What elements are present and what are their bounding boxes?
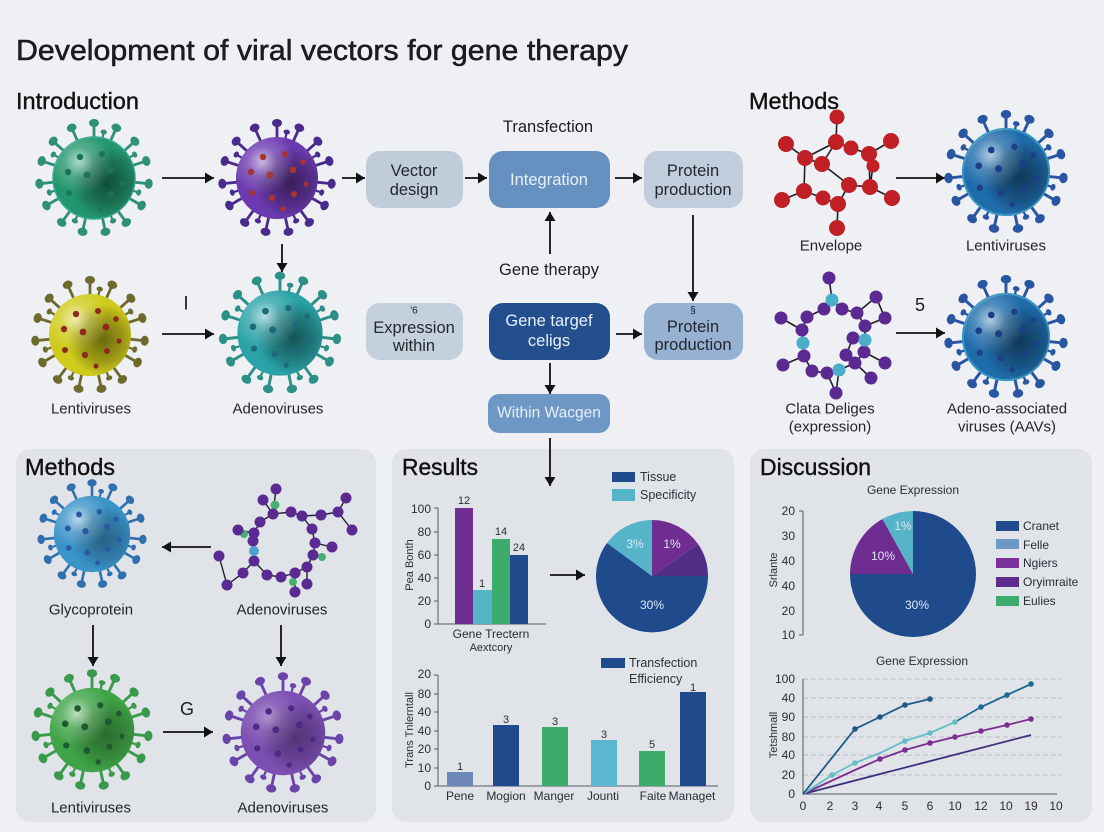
line chart: gene expression: 10 — [1049, 799, 1063, 813]
box: integration — [489, 151, 610, 208]
bar chart: transfection efficiency: 40 — [418, 724, 431, 738]
pie chart: gene expression: 30 — [782, 529, 795, 543]
bar chart: transfection efficiency: Jounti — [587, 789, 619, 803]
arrow: gene target to protein — [616, 333, 642, 335]
bar chart: gene treatment: Pea Bonth — [404, 539, 416, 591]
line chart: gene expression: 20 — [782, 768, 795, 782]
bar chart: transfection efficiency: Trans Tnlerntall — [404, 692, 416, 768]
bar chart: transfection efficiency: 1 — [457, 761, 463, 773]
bar chart: gene treatment: 80 — [418, 525, 431, 539]
label: glycoprotein: Glycoprotein — [49, 602, 133, 618]
legend: transfection efficiency: Transfection — [629, 656, 697, 670]
box: protein production top: Protein — [667, 162, 719, 180]
box: vector design: Vector — [391, 162, 438, 180]
legend: gene expression: Ngiers — [1023, 556, 1058, 570]
title: Development of viral vectors for gene therapy — [16, 35, 629, 67]
bar chart: gene treatment: Aextcory — [470, 642, 513, 654]
bar chart: gene treatment — [404, 495, 546, 654]
label: adeno-associated viruses: viruses (AAVs) — [958, 418, 1056, 436]
arrow: purple to teal — [281, 244, 283, 272]
heading: methods: Methods — [25, 454, 115, 480]
legend: gene expression: Eulies — [1023, 594, 1056, 608]
arrow: glycoprotein down — [92, 625, 94, 666]
pie chart: gene expression: 20 — [782, 604, 795, 618]
line chart: gene expression: Tetshmall — [768, 712, 780, 758]
arrow: protein down — [692, 215, 694, 301]
box: expression within: within — [392, 337, 435, 355]
box: expression within — [366, 303, 463, 360]
legend: gene expression: Cranet — [1023, 519, 1060, 533]
legend: gene expression: Felle — [1023, 538, 1049, 552]
bar chart: transfection efficiency: 3 — [601, 729, 607, 741]
bar chart: gene treatment: 40 — [418, 571, 431, 585]
pie chart: gene expression: 10 — [782, 628, 795, 642]
pie chart: gene expression: 20 — [782, 504, 795, 518]
pie chart: tissue specificity — [596, 520, 708, 632]
label: gene therapy: Gene therapy — [499, 261, 600, 279]
bar chart: gene treatment: 12 — [458, 495, 470, 507]
box: protein production top: production — [654, 181, 732, 199]
chart title: gene expression line: Gene Expression — [876, 654, 968, 668]
box: within wacgen — [488, 394, 610, 433]
line chart: gene expression: 0 — [800, 799, 807, 813]
icon: blue virus top — [944, 110, 1068, 234]
flow diagram — [366, 118, 743, 433]
heading: results: Results — [402, 454, 478, 480]
arrow: envelope to lentiviruses — [896, 177, 945, 179]
heading: introduction: Introduction — [16, 88, 139, 114]
line chart: gene expression: 6 — [927, 799, 934, 813]
bar chart: transfection efficiency: Manger — [534, 789, 574, 803]
line chart: gene expression: 12 — [974, 799, 988, 813]
arrow: molecule to aav — [896, 332, 945, 334]
icon: purple molecule — [774, 272, 892, 400]
line chart: gene expression: 3 — [852, 799, 859, 813]
bar chart: transfection efficiency: 80 — [418, 687, 431, 701]
line chart: gene expression: 100 — [775, 672, 795, 686]
box: expression within: Expression — [373, 319, 455, 337]
arrow: down into results — [549, 438, 551, 486]
line chart: gene expression: 2 — [827, 799, 834, 813]
box: vector design: design — [390, 181, 438, 199]
line chart: gene expression: 10 — [999, 799, 1013, 813]
line chart: gene expression: 80 — [782, 730, 795, 744]
arrow: adenoviruses down — [280, 625, 282, 666]
box: protein production top — [644, 151, 743, 208]
section: methods top right — [749, 88, 1068, 436]
label: envelope: Envelope — [800, 238, 862, 254]
box: integration: Integration — [510, 171, 588, 189]
line chart: gene expression: 40 — [782, 691, 795, 705]
chart title: gene expression pie: Gene Expression — [867, 483, 959, 497]
legend: tissue and specificity: Tissue — [640, 470, 676, 484]
pie chart: tissue specificity: 1% — [663, 537, 681, 551]
bar chart: transfection efficiency: 1 — [690, 682, 696, 694]
bar chart: gene treatment: 20 — [418, 594, 431, 608]
label: clata deliges: Clata Deliges — [785, 400, 875, 418]
box: within wacgen: Within Wacgen — [497, 404, 601, 422]
panel: results — [392, 438, 734, 822]
arrow: bar to pie — [550, 574, 585, 576]
icon: teal virus — [218, 272, 342, 394]
bar chart: transfection efficiency: 0 — [424, 779, 431, 793]
panel: methods — [16, 449, 376, 822]
icon: yellow virus — [31, 276, 149, 394]
bar chart: gene treatment: 14 — [495, 526, 507, 538]
label: lentiviruses: Lentiviruses — [51, 400, 131, 418]
line chart: gene expression: 19 — [1024, 799, 1038, 813]
bar chart: transfection efficiency: 3 — [503, 714, 509, 726]
bar chart: transfection efficiency: Managet — [669, 789, 716, 803]
bar chart: gene treatment: 0 — [424, 617, 431, 631]
legend: tissue and specificity — [612, 470, 697, 502]
line chart: gene expression: 4 — [876, 799, 883, 813]
arrow: gene target to within — [549, 363, 551, 394]
bar chart: gene treatment: 24 — [513, 542, 525, 554]
icon: green virus — [31, 669, 153, 791]
line chart: gene expression — [768, 672, 1063, 813]
bar chart: transfection efficiency: Pene — [446, 789, 474, 803]
label: clata deliges — [785, 400, 875, 436]
bar chart: transfection efficiency: 20 — [418, 667, 431, 681]
box: gene target cells: celigs — [528, 332, 570, 350]
label: adeno-associated viruses: Adeno-associated — [947, 400, 1067, 418]
bar chart: transfection efficiency — [404, 667, 718, 803]
section: introduction — [16, 88, 365, 418]
pie chart: tissue specificity: 30% — [640, 598, 664, 612]
label: clata deliges: (expression) — [789, 418, 871, 436]
arrow: molecule to blue virus — [162, 546, 211, 548]
box: gene target cells — [489, 303, 610, 360]
bar chart: transfection efficiency: 10 — [418, 761, 431, 775]
icon: blue virus bottom — [944, 275, 1068, 399]
panel: discussion — [750, 449, 1092, 822]
label: lentiviruses: Lentiviruses — [966, 238, 1046, 254]
bar chart: transfection efficiency: Mogion — [486, 789, 526, 803]
pie chart: gene expression: 1% — [894, 519, 912, 533]
label: lentiviruses: Lentiviruses — [51, 800, 131, 816]
line chart: gene expression: 90 — [782, 710, 795, 724]
label: G: G — [180, 699, 194, 719]
box: expression within: '6 — [410, 306, 418, 316]
bar chart: gene treatment: 60 — [418, 548, 431, 562]
arrow: green to purple — [163, 731, 213, 733]
line chart: gene expression: 10 — [948, 799, 962, 813]
icon: red molecule — [774, 110, 900, 236]
line chart: gene expression: 0 — [788, 787, 795, 801]
arrow: yellow to teal — [162, 333, 214, 335]
arrow: integration to protein — [615, 177, 642, 179]
pie chart: gene expression: 40 — [782, 579, 795, 593]
box: protein production bottom — [644, 303, 743, 360]
label: I: I — [183, 294, 189, 314]
box: vector design — [366, 151, 463, 208]
icon: purple virus — [218, 119, 336, 237]
arrow: gene therapy to integration — [549, 212, 551, 254]
pie chart: gene expression: 10% — [871, 549, 895, 563]
label: adeno-associated viruses — [947, 400, 1067, 436]
line chart: gene expression: 5 — [902, 799, 909, 813]
bar chart: gene treatment: Gene Trectern — [453, 627, 529, 641]
bar chart: transfection efficiency: 3 — [552, 716, 558, 728]
box: protein production bottom: Protein — [667, 318, 719, 336]
pie chart: gene expression — [768, 504, 976, 642]
label: adenoviruses: Adenoviruses — [233, 400, 323, 418]
box: gene target cells: Gene targef — [505, 312, 593, 330]
heading: discussion: Discussion — [760, 454, 871, 480]
pie chart: gene expression: 30% — [905, 598, 929, 612]
bar chart: gene treatment: 100 — [411, 502, 431, 516]
bar chart: transfection efficiency: 20 — [418, 742, 431, 756]
arrow: green to purple — [162, 177, 214, 179]
legend: gene expression — [996, 519, 1079, 608]
box: protein production bottom: production — [654, 336, 732, 354]
legend: gene expression: Oryimraite — [1023, 575, 1079, 589]
icon: purple virus — [222, 672, 344, 794]
legend: transfection efficiency — [601, 656, 697, 686]
pie chart: gene expression: 40 — [782, 554, 795, 568]
bar chart: transfection efficiency: 40 — [418, 705, 431, 719]
label: adenoviruses upper: Adenoviruses — [237, 602, 327, 618]
icon: purple molecule — [214, 484, 358, 598]
label: adenoviruses lower: Adenoviruses — [238, 800, 328, 816]
label: transfection: Transfection — [503, 118, 593, 136]
icon: green virus — [35, 119, 153, 237]
arrow: purple to vector design — [342, 177, 365, 179]
heading: methods: Methods — [749, 88, 839, 114]
bar chart: transfection efficiency: 5 — [649, 739, 655, 751]
pie chart: gene expression: Srlante — [768, 553, 780, 587]
label: 5: 5 — [915, 295, 925, 315]
pie chart: tissue specificity: 3% — [626, 537, 644, 551]
legend: transfection efficiency: Efficiency — [629, 672, 683, 686]
bar chart: transfection efficiency: Faite — [640, 789, 667, 803]
arrow: vector to integration — [465, 177, 487, 179]
bar chart: gene treatment: 1 — [479, 578, 485, 590]
box: protein production bottom: § — [690, 306, 696, 316]
icon: blue virus — [37, 479, 147, 589]
line chart: gene expression: 40 — [782, 748, 795, 762]
legend: tissue and specificity: Specificity — [640, 488, 697, 502]
